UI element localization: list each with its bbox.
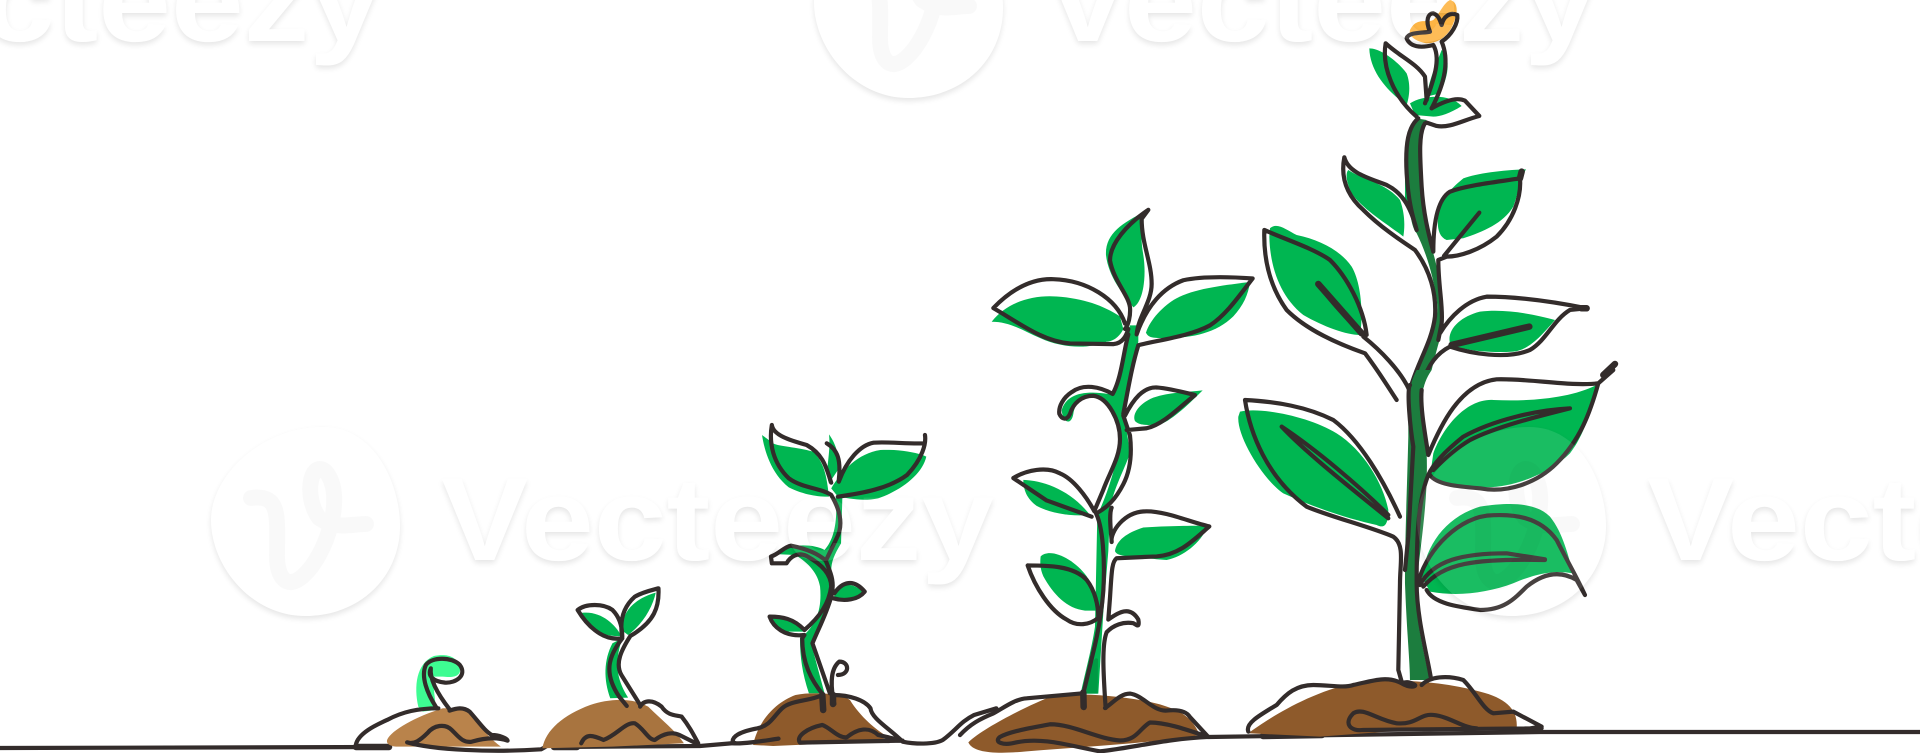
- stage 1: sprout: [356, 655, 628, 751]
- upper left leaf colour: [992, 296, 1123, 347]
- stage 5: flowering plant: [1238, 0, 1615, 737]
- leaf colours: [1269, 48, 1555, 352]
- mound 3 outline: [822, 695, 833, 710]
- plant outline: [993, 210, 1253, 708]
- soil mound 1: [387, 708, 501, 747]
- plant outline: [770, 425, 925, 695]
- stage 4: growing plant: [960, 210, 1253, 753]
- top leaf colour: [1106, 212, 1145, 307]
- mound 1 outline: [356, 704, 628, 751]
- lower stem shade: [1086, 658, 1098, 694]
- lower part: [1238, 370, 1613, 737]
- flower colour: [1410, 0, 1457, 43]
- flower outline: [1407, 13, 1457, 108]
- mound 4 outline: [960, 694, 1208, 751]
- watermark logo right: [1417, 427, 1606, 616]
- mound 5 outline: [1248, 677, 1542, 732]
- left leaf colour: [762, 435, 829, 497]
- seedling outline: [578, 588, 659, 706]
- ground line: [0, 732, 1920, 748]
- stem base: [1080, 693, 1087, 707]
- soil mound 2: [542, 700, 684, 748]
- mound 5 soil: [1248, 681, 1517, 737]
- watermark logo marks: [251, 0, 1572, 582]
- soil mound 4: [968, 694, 1200, 753]
- watermark logo left: [211, 427, 400, 616]
- seedling stem colour: [605, 638, 628, 698]
- stem colour: [773, 497, 842, 693]
- right leaf colour: [831, 450, 926, 500]
- watermark text middle: Vecteezy: [441, 454, 994, 586]
- upper part: [1264, 0, 1615, 400]
- upper right leaf colour: [1146, 282, 1250, 338]
- main stem upper: [1407, 118, 1443, 370]
- middle right leaf colour: [1115, 526, 1208, 560]
- lower leaves outline: [1245, 370, 1613, 682]
- stage 2: seedling: [542, 588, 698, 748]
- small right leaf colour: [1134, 390, 1203, 425]
- lower left leaf colour: [1040, 553, 1098, 611]
- soil mound 3: [753, 693, 890, 746]
- seedling leaves colour: [579, 593, 656, 636]
- stem colour: [1062, 325, 1138, 694]
- top stem colour: [1427, 50, 1448, 97]
- sprout colour: [416, 655, 460, 712]
- mound 2 outline: [581, 701, 698, 744]
- curl: [832, 662, 847, 704]
- watermark logo top: [814, 0, 1003, 98]
- sprout line: [424, 659, 462, 709]
- upper leaves outline: [1264, 43, 1587, 400]
- leaf veins: [1318, 172, 1615, 375]
- stage 3: young plant: [733, 425, 996, 746]
- lower leaves colour: [1238, 410, 1573, 594]
- bud colour: [827, 434, 838, 483]
- small leaves colour: [770, 585, 863, 632]
- middle left leaf colour: [1023, 480, 1090, 515]
- main stem lower: [1405, 370, 1432, 680]
- large right leaf colour: [1430, 385, 1597, 487]
